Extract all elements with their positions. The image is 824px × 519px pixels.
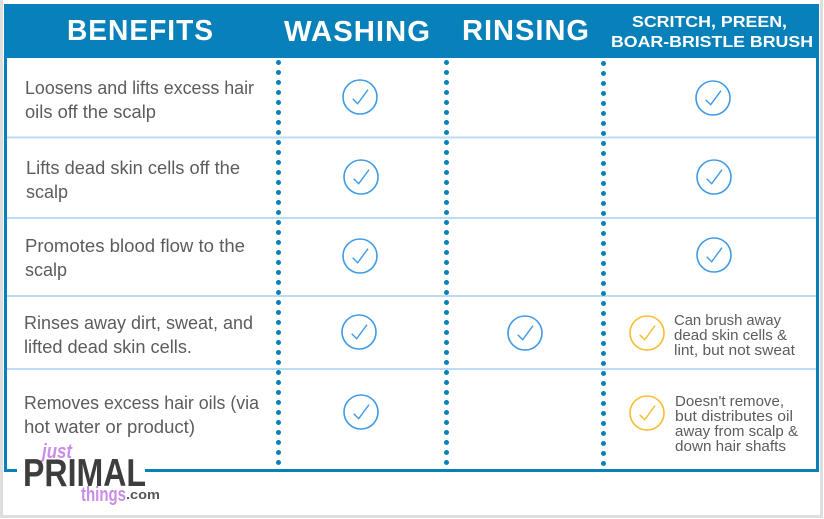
icon: partial check brush — [630, 396, 664, 430]
brush note: dead skin cells & — [674, 327, 787, 344]
logo: PRIMAL — [23, 452, 146, 495]
icon: partial check brush — [630, 316, 664, 350]
row 5 text — [24, 393, 260, 437]
dotted column dividers — [278, 62, 604, 468]
row 2 text — [26, 158, 240, 202]
brush note: lint, but not sweat — [674, 342, 796, 359]
logo: just — [39, 441, 73, 463]
icon: check brush — [697, 160, 731, 194]
icon: check washing — [344, 160, 378, 194]
logo — [23, 441, 160, 506]
heading: scritch, preen, boar-bristle brush — [611, 14, 813, 51]
icon: check brush — [697, 238, 731, 272]
heading: scritch, preen, boar-bristle brush: BOAR-BRISTLE BRUSH — [611, 34, 813, 51]
brush note: Can brush away — [674, 312, 781, 329]
heading: rinsing: RINSING — [462, 15, 590, 47]
heading: benefits: BENEFITS — [67, 15, 214, 47]
row 4 — [24, 312, 796, 359]
row 1 — [25, 78, 730, 122]
row 1 text: Loosens and lifts excess hair — [25, 78, 254, 98]
row 1 text — [25, 78, 254, 122]
icon: check rinsing — [508, 316, 542, 350]
heading: washing: WASHING — [284, 16, 431, 48]
row 5 text: hot water or product) — [24, 417, 195, 437]
row 2 text: Lifts dead skin cells off the — [26, 158, 240, 178]
row 2 — [26, 158, 731, 202]
row 3 text — [25, 236, 245, 280]
heading: scritch, preen, boar-bristle brush: SCRITCH, PREEN, — [632, 14, 787, 31]
icon: check brush — [696, 81, 730, 115]
row 5 — [24, 393, 798, 455]
row 4 text: lifted dead skin cells. — [24, 337, 192, 357]
row 3 text: Promotes blood flow to the — [25, 236, 245, 256]
row 2 text: scalp — [26, 182, 68, 202]
logo: .com — [126, 487, 160, 502]
brush note — [674, 312, 796, 359]
row 3 text: scalp — [25, 260, 67, 280]
brush note: but distributes oil — [675, 408, 793, 425]
row 3 — [25, 236, 731, 280]
brush note: Doesn't remove, — [675, 393, 784, 410]
brush note: down hair shafts — [675, 438, 786, 455]
row dividers — [7, 138, 816, 369]
icon: check washing — [343, 80, 377, 114]
header bar — [4, 4, 819, 58]
icon: check washing — [344, 395, 378, 429]
icon: check washing — [343, 239, 377, 273]
row 4 text: Rinses away dirt, sweat, and — [24, 313, 253, 333]
row 4 text — [24, 313, 253, 357]
brush note — [675, 393, 798, 455]
icon: check washing — [342, 315, 376, 349]
row 5 text: Removes excess hair oils (via — [24, 393, 260, 413]
logo: things — [81, 484, 126, 506]
row 1 text: oils off the scalp — [25, 102, 156, 122]
brush note: away from scalp & — [675, 423, 798, 440]
